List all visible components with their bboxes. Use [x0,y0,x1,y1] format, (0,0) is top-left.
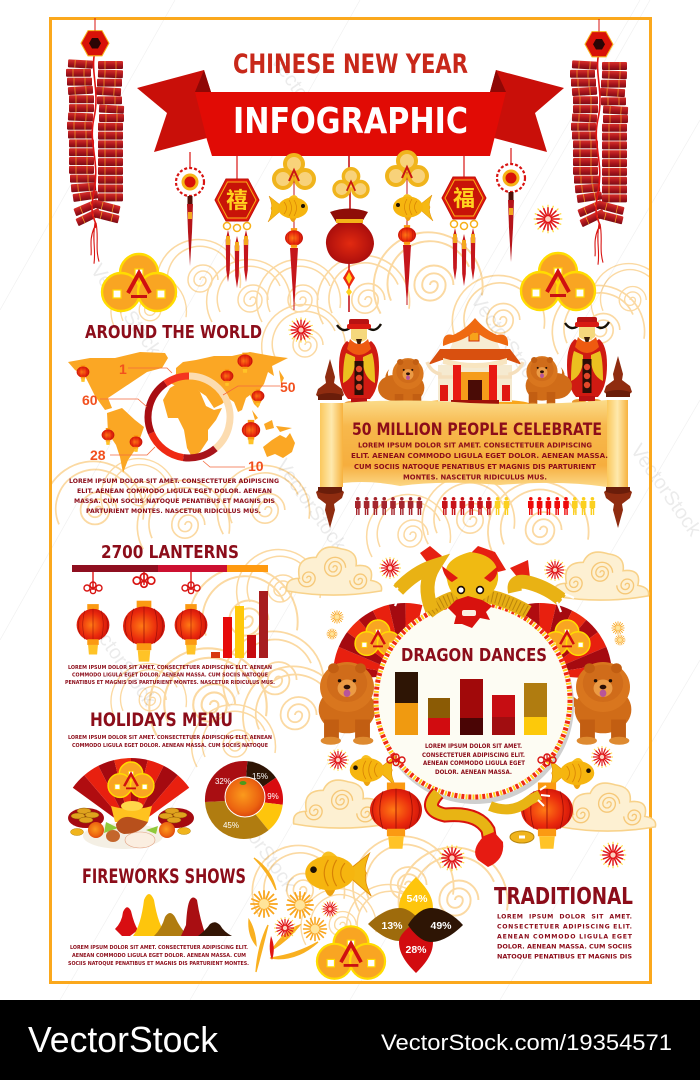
donut labels: 45% [223,821,239,830]
dragon dance circle [376,603,574,804]
leader lines [100,368,280,467]
goldfish charm right [387,152,433,305]
lantern 3 [175,572,207,654]
scroll finials [316,356,632,528]
donut labels [215,772,279,830]
traditional text: DOLOR. AENEAN MASSA. CUM SOCIIS [497,944,632,950]
donut ring [148,376,230,458]
around the world text: LOREM IPSUM DOLOR SIT AMET. CONSECTETUER ADIPISCING [69,478,279,485]
big goldfish [305,852,371,896]
orange frame [50,18,650,982]
firework near heading [288,317,314,343]
chow dog big right [564,662,631,745]
petal labels: 54% [406,893,428,905]
fireworks text [68,945,249,967]
title: chinese new year: CHINESE NEW YEAR [233,49,468,80]
heading: around the world: AROUND THE WORLD [85,322,262,343]
footer [0,1000,700,1080]
lanterns text: PENATIBUS ET MAGNIS DIS PARTURIENT MONTES. NASCETUR RIDICULUS MUS. [65,680,275,686]
heading: dragon dances: DRAGON DANCES [401,645,547,666]
faint watermark: VectorStock [466,290,546,391]
chow dog right [526,356,572,408]
holidays text [68,735,272,749]
scroll text [351,442,608,482]
coins right [521,253,595,310]
petal chart [368,877,463,973]
heading: 50 million: 50 MILLION PEOPLE CELEBRATE [352,420,602,439]
around the world text: MASSA. CUM SOCIIS NATOQUE PENATIBUS ET MAGNIS DIS [74,498,275,505]
petal labels: 28% [405,944,427,956]
around the world text: ELIT. AENEAN COMMODO LIGULA EGET DOLOR. AENEAN [77,488,272,495]
donut labels: 9% [267,792,279,801]
map values: 1 [119,361,127,377]
scroll text: CUM SOCIIS NATOQUE PENATIBUS ET MAGNIS DIS PARTURIENT [354,463,597,471]
hexagon charm right [442,154,486,286]
map values: 60 [82,392,98,408]
world map [68,352,296,474]
mandarin figure left [337,319,381,407]
scroll text: LOREM IPSUM DOLOR SIT AMET. CONSECTETUER ADIPISCING [358,442,592,450]
dragon text [422,743,526,776]
fireworks text: SOCIIS NATOQUE PENATIBUS ET MAGNIS DIS PARTURIENT MONTES. [68,961,249,967]
fireworks text: LOREM IPSUM DOLOR SIT AMET. CONSECTETUER ADIPISCING ELIT. [70,945,248,951]
dragon text: LOREM IPSUM DOLOR SIT AMET. [425,743,522,750]
scroll [316,356,632,528]
lanterns text: COMMODO LIGULA EGET DOLOR. AENEAN MASSA. CUM SOCIIS NATOQUE [72,672,268,678]
holiday fan and food [68,758,194,849]
scroll text: MONTES. NASCETUR RIDICULUS MUS. [403,474,547,482]
footer image id: VectorStock.com/19354571 [381,1030,672,1055]
faint watermark: VectorStock [266,50,346,151]
scroll text: ELIT. AENEAN COMMODO LIGULA EGET DOLOR. AENEAN MASSA. [351,452,608,460]
faint watermark: VectorStock [271,455,351,556]
hanging charm left [176,152,204,266]
lantern right in dragon section [521,754,573,849]
people group 2 [442,497,509,515]
donut chart [205,761,283,839]
traditional text: LOREM IPSUM DOLOR SIT AMET. [497,914,632,920]
mountain chart [115,894,232,936]
lanterns text [65,665,275,686]
faint watermark: VectorStock [441,615,521,716]
lantern 1 [77,572,109,654]
petal labels: 13% [381,920,403,932]
holidays text: LOREM IPSUM DOLOR SIT AMET. CONSECTETUER ADIPISCING ELIT. AENEAN [68,735,272,741]
heading: holidays menu: HOLIDAYS MENU [90,709,233,731]
around the world text: PARTURIENT MONTES. NASCETUR RIDICULUS MUS. [86,508,261,515]
traditional text: NATOQUE PENATIBUS ET MAGNIS DIS [497,954,632,960]
title: infographic: INFOGRAPHIC [233,101,468,142]
map lanterns [77,353,264,452]
lanterns text: LOREM IPSUM DOLOR SIT AMET. CONSECTETUER ADIPISCING ELIT. AENEAN [68,665,272,671]
footer logo: VectorStock [28,1019,219,1060]
map values [82,361,296,474]
dragon section clouds [287,547,656,831]
traditional text [497,914,633,960]
petal labels: 49% [430,920,452,932]
hexagon charm left [215,156,259,288]
lanterns progress bar [72,565,268,572]
heading: fireworks shows: FIREWORKS SHOWS [82,865,246,888]
chow dog big left [319,662,386,745]
hexagon charm right: 福 [453,186,475,211]
map values: 50 [280,379,296,395]
faint watermark: VectorStock [81,610,161,711]
dragon text: AENEAN COMMODO LIGULA EGET [423,760,526,767]
mandarin figure right [565,317,609,405]
firework top right [534,205,562,233]
lantern 2 [123,572,165,662]
dragon text: DOLOR. AENEAN MASSA. [435,769,512,776]
fish right in dragon section [548,758,594,789]
header banner [137,49,564,156]
fish left in dragon section [350,755,396,786]
stacked bars [395,672,547,735]
orange center [224,776,266,818]
dragon head and body [386,546,574,628]
heading: 2700 lanterns: 2700 LANTERNS [101,542,239,563]
traditional text: AENEAN COMMODO LIGULA EGET [497,934,633,940]
donut labels: 15% [252,772,268,781]
coins bottom [317,926,385,979]
faint watermark: VectorStock [86,260,166,361]
firecrackers right [570,19,628,265]
lantern left in dragon section [370,754,422,849]
around the world text [69,478,279,515]
firework flowers [249,858,339,972]
dragon text: CONSECTETUER ADIPISCING ELIT. [422,752,525,759]
holidays text: COMMODO LIGULA EGET DOLOR. AENEAN MASSA. CUM SOCIIS NATOQUE [72,743,268,749]
donut labels: 32% [215,777,231,786]
hanging charm right [497,148,525,262]
map values: 10 [248,458,264,474]
temple [420,318,530,409]
people group 3 [528,497,595,515]
firecrackers left [66,18,124,264]
map values: 28 [90,447,106,463]
goldfish charm left [268,155,314,310]
coin near tail [510,831,534,843]
background swirls [43,232,666,947]
chow dog left [378,358,424,410]
traditional text: CONSECTETUER ADIPISCING ELIT. [497,924,632,930]
faint watermark: VectorStock [221,795,301,896]
people group 1 [355,497,422,515]
hexagon charm left: 禧 [226,188,248,213]
red fireworks [327,557,626,871]
fireworks text: AENEAN COMMODO LIGULA EGET DOLOR. AENEAN MASSA. CUM [72,953,246,959]
petal labels [381,893,452,956]
coins left [102,254,176,311]
dragon tail [431,786,550,867]
heading: traditional: TRADITIONAL [494,884,633,910]
dragon fans [314,582,631,712]
bar chart [211,591,268,658]
money bag [326,156,374,312]
